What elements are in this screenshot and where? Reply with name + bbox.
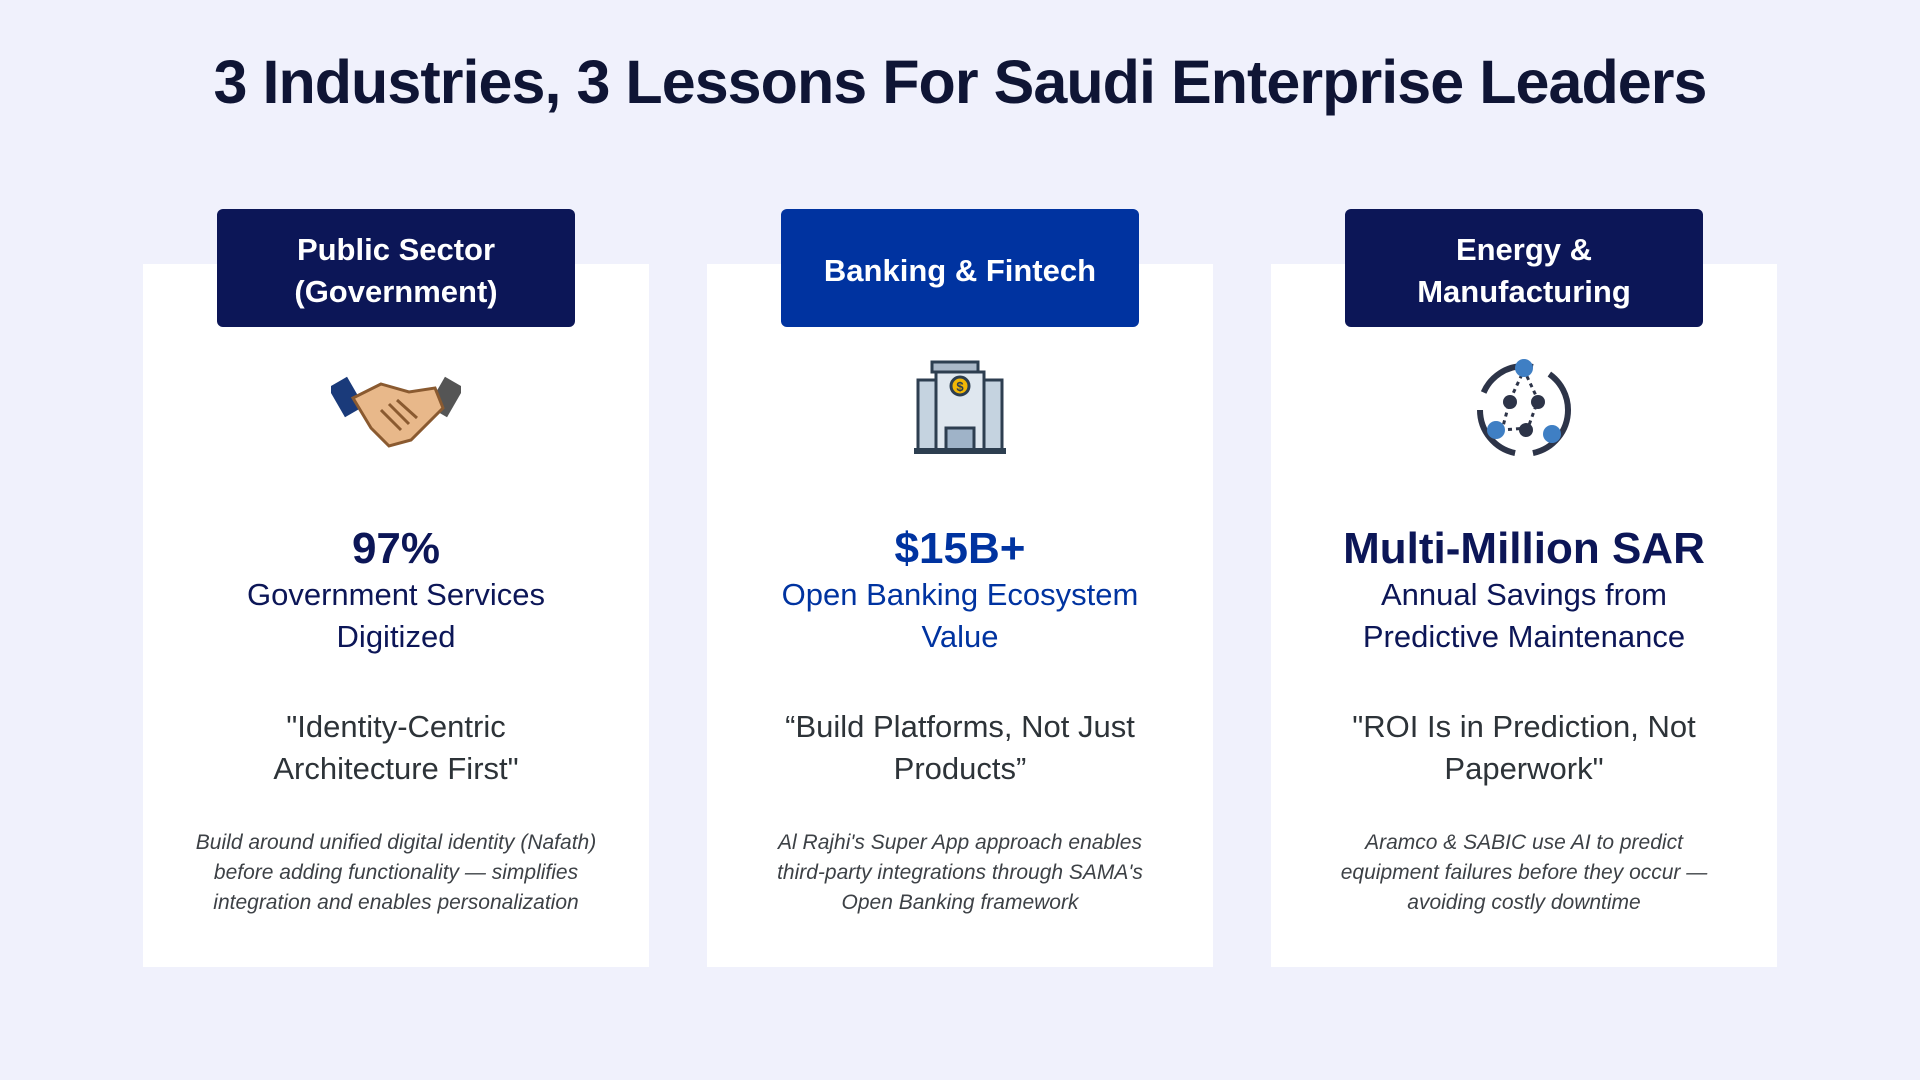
description [777,831,1143,914]
description: Open Banking framework [842,891,1078,914]
description: avoiding costly downtime [1407,891,1641,914]
description [1341,831,1708,914]
stat label [247,577,545,654]
quote: Products” [894,751,1026,786]
tab: energy: Manufacturing [1417,274,1631,309]
icon: handshake [331,376,461,448]
title: 3 Industries, 3 Lessons For Saudi Enterprise Leaders [213,48,1707,116]
icon: network cycle [1477,359,1571,456]
quote: "ROI Is in Prediction, Not [1352,709,1696,744]
description: third-party integrations through SAMA's [777,861,1143,884]
stat label: Digitized [337,619,455,654]
description: Aramco & SABIC use AI to predict [1365,831,1683,854]
tab: public sector [217,209,575,327]
quote [785,709,1135,786]
stat label: Annual Savings from [1381,577,1667,612]
quote: Architecture First" [273,751,519,786]
quote [273,709,519,786]
tab: banking: Banking & Fintech [824,253,1096,288]
panel: banking [707,264,1213,967]
stat label: Predictive Maintenance [1363,619,1685,654]
tab: banking [781,209,1139,327]
stat: Multi-Million SAR [1343,524,1705,573]
panel: public sector [143,264,649,967]
icon: bank building [914,360,1006,454]
stat label: Government Services [247,577,545,612]
stat label: Value [922,619,998,654]
quote [1352,709,1696,786]
quote: “Build Platforms, Not Just [785,709,1135,744]
description: Al Rajhi's Super App approach enables [778,831,1142,854]
icon: bank building: $ [956,379,964,394]
tab: public sector: Public Sector [297,232,495,267]
tab: energy: Energy & [1456,232,1592,267]
stat label [782,577,1138,654]
description: equipment failures before they occur — [1341,861,1707,884]
stat label: Open Banking Ecosystem [782,577,1138,612]
tab: public sector: (Government) [294,274,498,309]
stat label [1363,577,1685,654]
tab: energy [1345,209,1703,327]
panel: energy [1271,264,1777,967]
quote: "Identity-Centric [286,709,506,744]
quote: Paperwork" [1444,751,1604,786]
stat: $15B+ [895,524,1025,573]
description: Build around unified digital identity (Nafath) before adding functionality — simplifies integration and enables personalization [196,831,596,914]
stat: 97% [352,524,440,573]
